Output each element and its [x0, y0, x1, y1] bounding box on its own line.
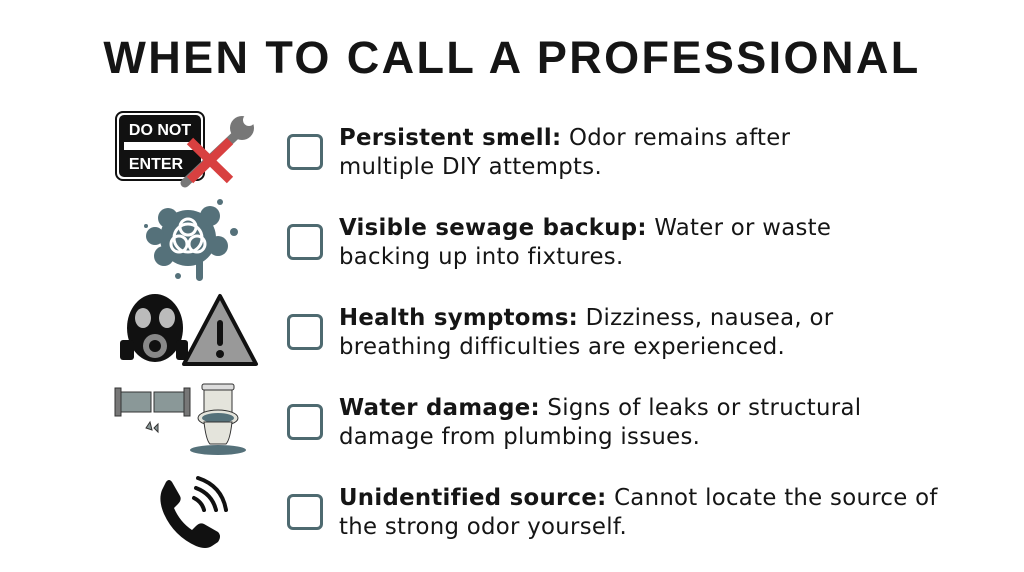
icon: do not enter sign with wrench	[115, 111, 254, 188]
checkbox	[287, 494, 323, 530]
row 1: persistent smell	[115, 111, 790, 188]
text: Visible sewage backup: Water or waste	[339, 215, 831, 241]
checkbox	[287, 224, 323, 260]
text: damage from plumbing issues.	[339, 424, 700, 450]
text: the strong odor yourself.	[339, 514, 627, 540]
icon: broken pipe and toilet	[114, 384, 246, 455]
row 3: health symptoms	[120, 294, 834, 366]
row 2: sewage backup	[144, 199, 831, 281]
text	[339, 395, 861, 450]
text	[339, 305, 834, 360]
text	[339, 125, 790, 180]
text: Unidentified source: Cannot locate the source of	[339, 485, 938, 511]
text	[339, 485, 938, 540]
checkbox	[287, 314, 323, 350]
text: breathing difficulties are experienced.	[339, 334, 785, 360]
row 4: water damage	[114, 384, 861, 455]
text: backing up into fixtures.	[339, 244, 624, 270]
text: Persistent smell: Odor remains after	[339, 125, 790, 151]
text: multiple DIY attempts.	[339, 154, 602, 180]
icon: gas mask and warning	[120, 294, 258, 366]
icon: do not enter sign with wrench: ENTER	[129, 156, 184, 173]
row 5: unidentified source	[160, 476, 938, 548]
title: WHEN TO CALL A PROFESSIONAL	[103, 32, 921, 83]
icon: phone with signal	[160, 476, 228, 548]
checkbox	[287, 404, 323, 440]
icon: do not enter sign with wrench: DO NOT	[129, 122, 191, 139]
text: Water damage: Signs of leaks or structural	[339, 395, 861, 421]
text	[339, 215, 831, 270]
checkbox	[287, 134, 323, 170]
icon: biohazard splat	[144, 199, 238, 281]
text: Health symptoms: Dizziness, nausea, or	[339, 305, 833, 331]
